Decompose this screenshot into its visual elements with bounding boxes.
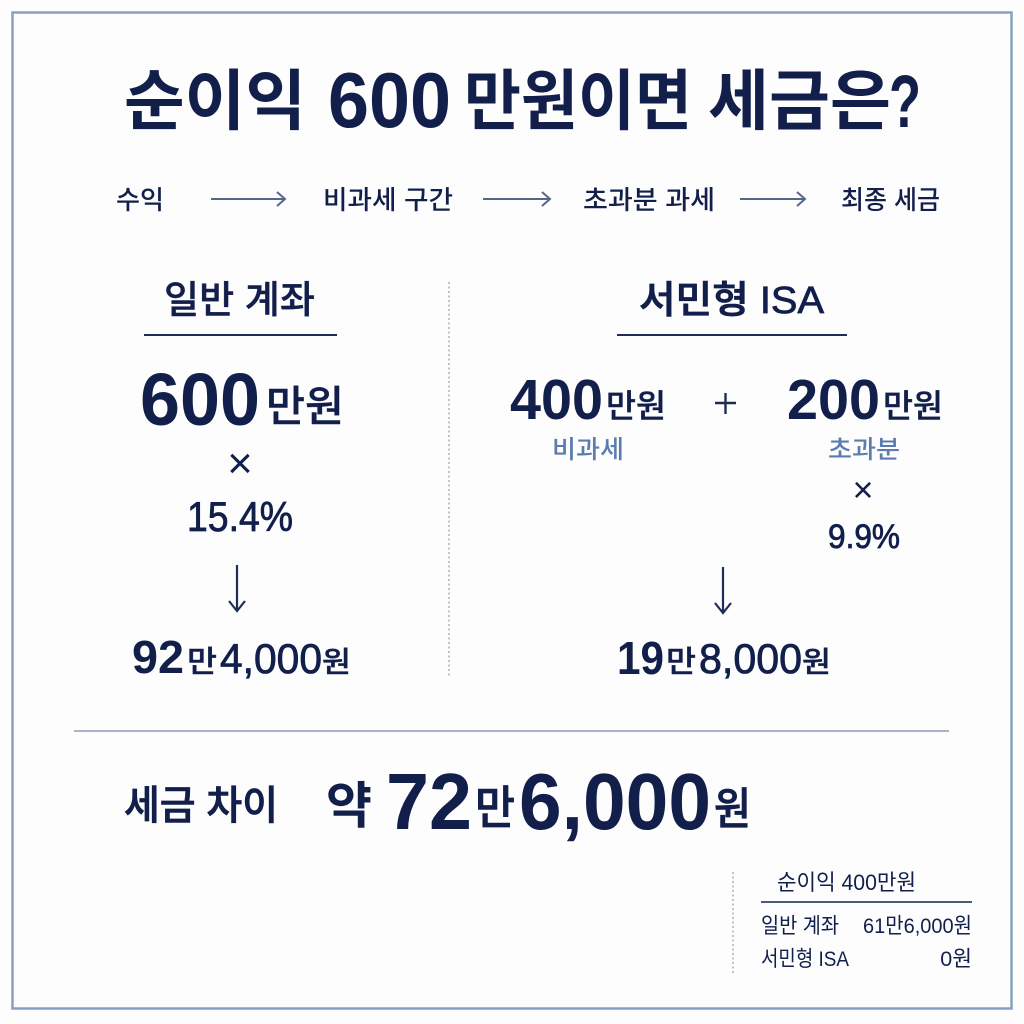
amount: 200만원 초과분 <box>787 368 943 464</box>
title: 만원이면 <box>464 64 692 138</box>
rate: 9.9%: 9.9% <box>828 518 900 556</box>
value: 약 72만 6,000원: 약 <box>326 778 372 834</box>
amount: 600만원: 600 <box>140 358 260 441</box>
value: 약 72만 6,000원: 6,000 <box>519 757 711 846</box>
result: 19만 8,000원: 원 <box>802 646 831 679</box>
row: 서민형 ISA <box>761 947 972 971</box>
arrow: step 2 to 3 <box>483 192 550 206</box>
value: 약 72만 6,000원: 만 <box>475 782 515 834</box>
arrow: down <box>715 567 731 613</box>
amount: 200만원 초과분: 만원 <box>883 388 943 424</box>
row: 일반 계좌: 61만6,000원 <box>863 914 972 938</box>
step: 수익: 수익 <box>116 185 164 215</box>
step: 초과분 과세: 초과분 과세 <box>583 185 715 215</box>
title: 세금은 <box>708 64 891 138</box>
row: 서민형 ISA: 0원 <box>940 947 972 971</box>
result: 92만 4,000원: 원 <box>322 646 351 679</box>
result: 92만 4,000원: 만 <box>187 646 217 679</box>
title: 600 <box>328 56 451 144</box>
heading: 일반 계좌: 일반 계좌 <box>164 280 315 322</box>
multiply sign: × <box>227 439 253 488</box>
arrow: step 3 to 4 <box>740 192 805 206</box>
amount: 400만원 비과세 <box>510 368 666 464</box>
plus sign <box>715 393 736 414</box>
step: 비과세 구간: 비과세 구간 <box>323 185 453 215</box>
value: 약 72만 6,000원: 원 <box>714 785 751 834</box>
row: 일반 계좌: 일반 계좌 <box>761 914 839 938</box>
amount: 200만원 초과분: 200 <box>787 368 880 432</box>
heading: 서민형 ISA: 서민형 ISA <box>639 280 825 322</box>
value: 약 72만 6,000원: 72 <box>386 757 472 846</box>
multiply sign: × <box>852 469 874 510</box>
amount: 600만원 <box>140 358 344 441</box>
panel: 서민형 ISA <box>510 280 943 684</box>
result: 92만 4,000원: 92 <box>132 631 184 683</box>
step: 최종 세금: 최종 세금 <box>841 185 940 215</box>
result: 19만 8,000원 <box>617 632 831 684</box>
amount: 400만원 비과세: 비과세 <box>552 436 624 464</box>
amount: 600만원: 만원 <box>266 383 344 430</box>
table heading: 순이익 400만원 <box>777 870 916 895</box>
result: 92만 4,000원 <box>132 631 351 683</box>
row: 일반 계좌 <box>761 914 972 938</box>
table: 순이익 400만원 <box>761 870 972 971</box>
panel: 일반 계좌 <box>132 280 351 683</box>
summary: tax difference <box>124 757 751 846</box>
amount: 200만원 초과분: 초과분 <box>828 436 900 464</box>
title: 순이익 <box>124 64 306 138</box>
result: 19만 8,000원: 8,000 <box>699 635 802 682</box>
result: 92만 4,000원: 4,000 <box>220 635 322 682</box>
value: 약 72만 6,000원 <box>326 757 751 846</box>
result: 19만 8,000원: 만 <box>666 646 696 679</box>
row: 서민형 ISA: 서민형 ISA <box>761 947 850 971</box>
title: ? <box>889 60 921 143</box>
result: 19만 8,000원: 19 <box>617 632 664 684</box>
amount: 400만원 비과세: 400 <box>510 368 603 432</box>
process flow <box>116 185 940 215</box>
amount: 400만원 비과세: 만원 <box>606 388 666 424</box>
arrow: down <box>229 565 245 611</box>
rate: 15.4%: 15.4% <box>187 493 293 540</box>
arrow: step 1 to 2 <box>211 192 285 206</box>
label: 세금 차이: 세금 차이 <box>124 784 278 828</box>
